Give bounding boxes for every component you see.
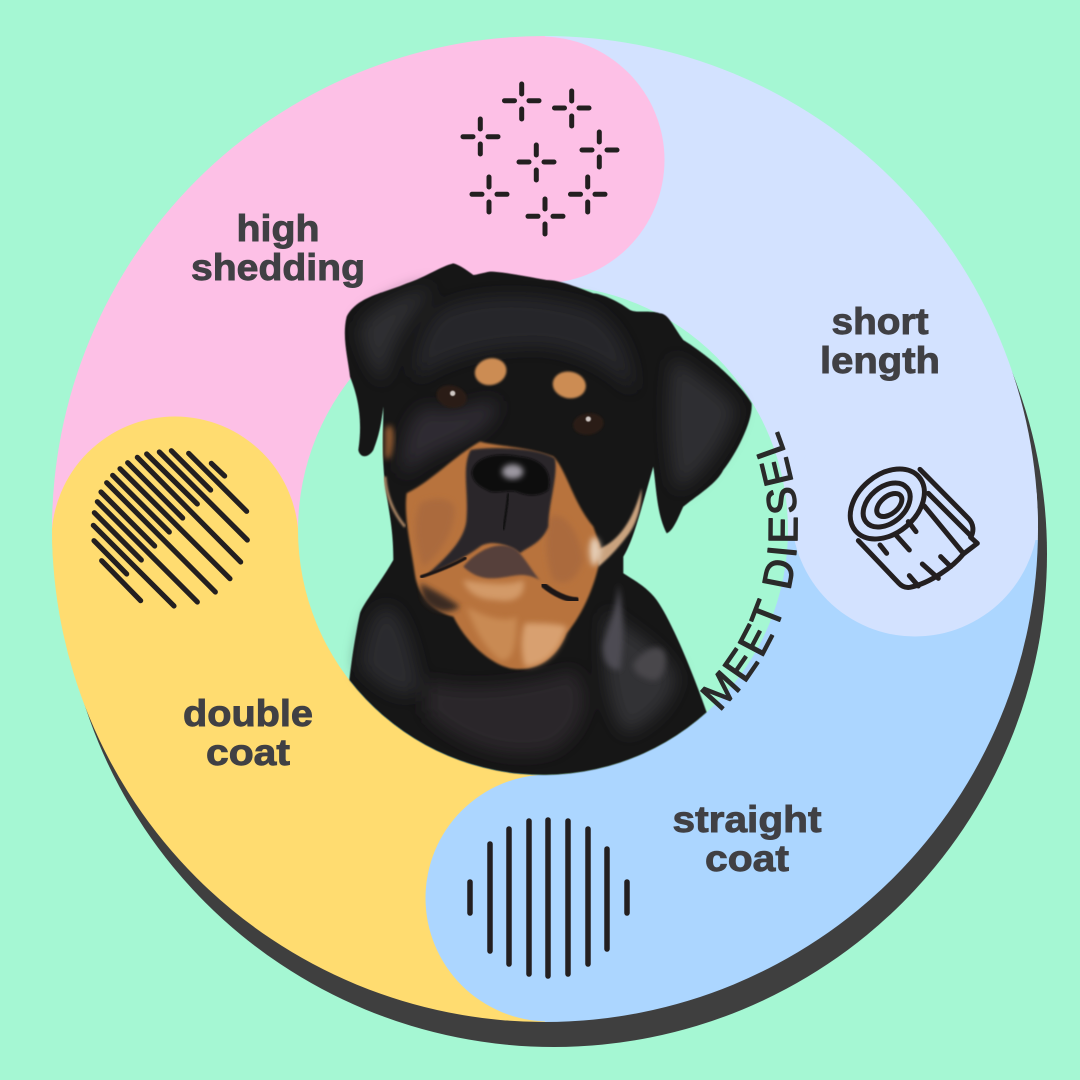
rounded head: high shedding	[545, 36, 664, 282]
rounded head: double coat	[52, 416, 298, 558]
brow spot right	[551, 369, 588, 401]
chest light patch	[633, 648, 666, 680]
centre hole	[298, 285, 788, 775]
lip lines	[422, 558, 465, 577]
heading: straight coat: coat	[705, 838, 789, 879]
heading: short length: short	[832, 301, 928, 342]
eye right	[572, 411, 605, 437]
neck fold	[603, 583, 623, 670]
icon: straight coat vertical lines	[470, 820, 627, 976]
nose highlight	[502, 464, 523, 479]
tan side of neck	[385, 477, 405, 527]
eye glints	[450, 391, 591, 422]
fur highlights	[360, 287, 433, 383]
mouth	[463, 545, 540, 580]
dark snout	[427, 448, 556, 575]
rounded head: short length	[794, 489, 1038, 636]
heading: high shedding: high	[236, 208, 320, 249]
segment: straight coat	[545, 540, 1055, 1040]
icon: measuring tape	[837, 455, 977, 587]
right lip	[543, 585, 577, 600]
rounded head: straight coat	[426, 775, 545, 1022]
segment: short length	[545, 20, 1055, 540]
eye left	[434, 382, 469, 411]
tan strip left of face	[385, 425, 394, 459]
heading: high shedding: shedding	[191, 247, 365, 288]
light tan patches	[463, 580, 524, 601]
icon: double coat hatch circle	[93, 451, 247, 606]
dog portrait	[345, 263, 752, 775]
muzzle tan markings	[406, 442, 602, 669]
segment: double coat	[40, 540, 545, 1040]
pale tan cheek edge	[597, 488, 642, 567]
heading: double coat: coat	[206, 732, 290, 773]
heading: double coat: double	[183, 693, 313, 734]
nose line	[503, 493, 508, 530]
heading: short length: length	[820, 340, 940, 381]
heading: straight coat: straight	[672, 799, 822, 840]
icon: sparkles	[463, 84, 617, 234]
brow spot left	[472, 355, 510, 389]
segment: high shedding	[40, 20, 545, 540]
dog silhouette	[345, 263, 752, 775]
curved title: meet diesel: MEET DIESEL	[700, 431, 798, 711]
nose	[472, 455, 549, 495]
